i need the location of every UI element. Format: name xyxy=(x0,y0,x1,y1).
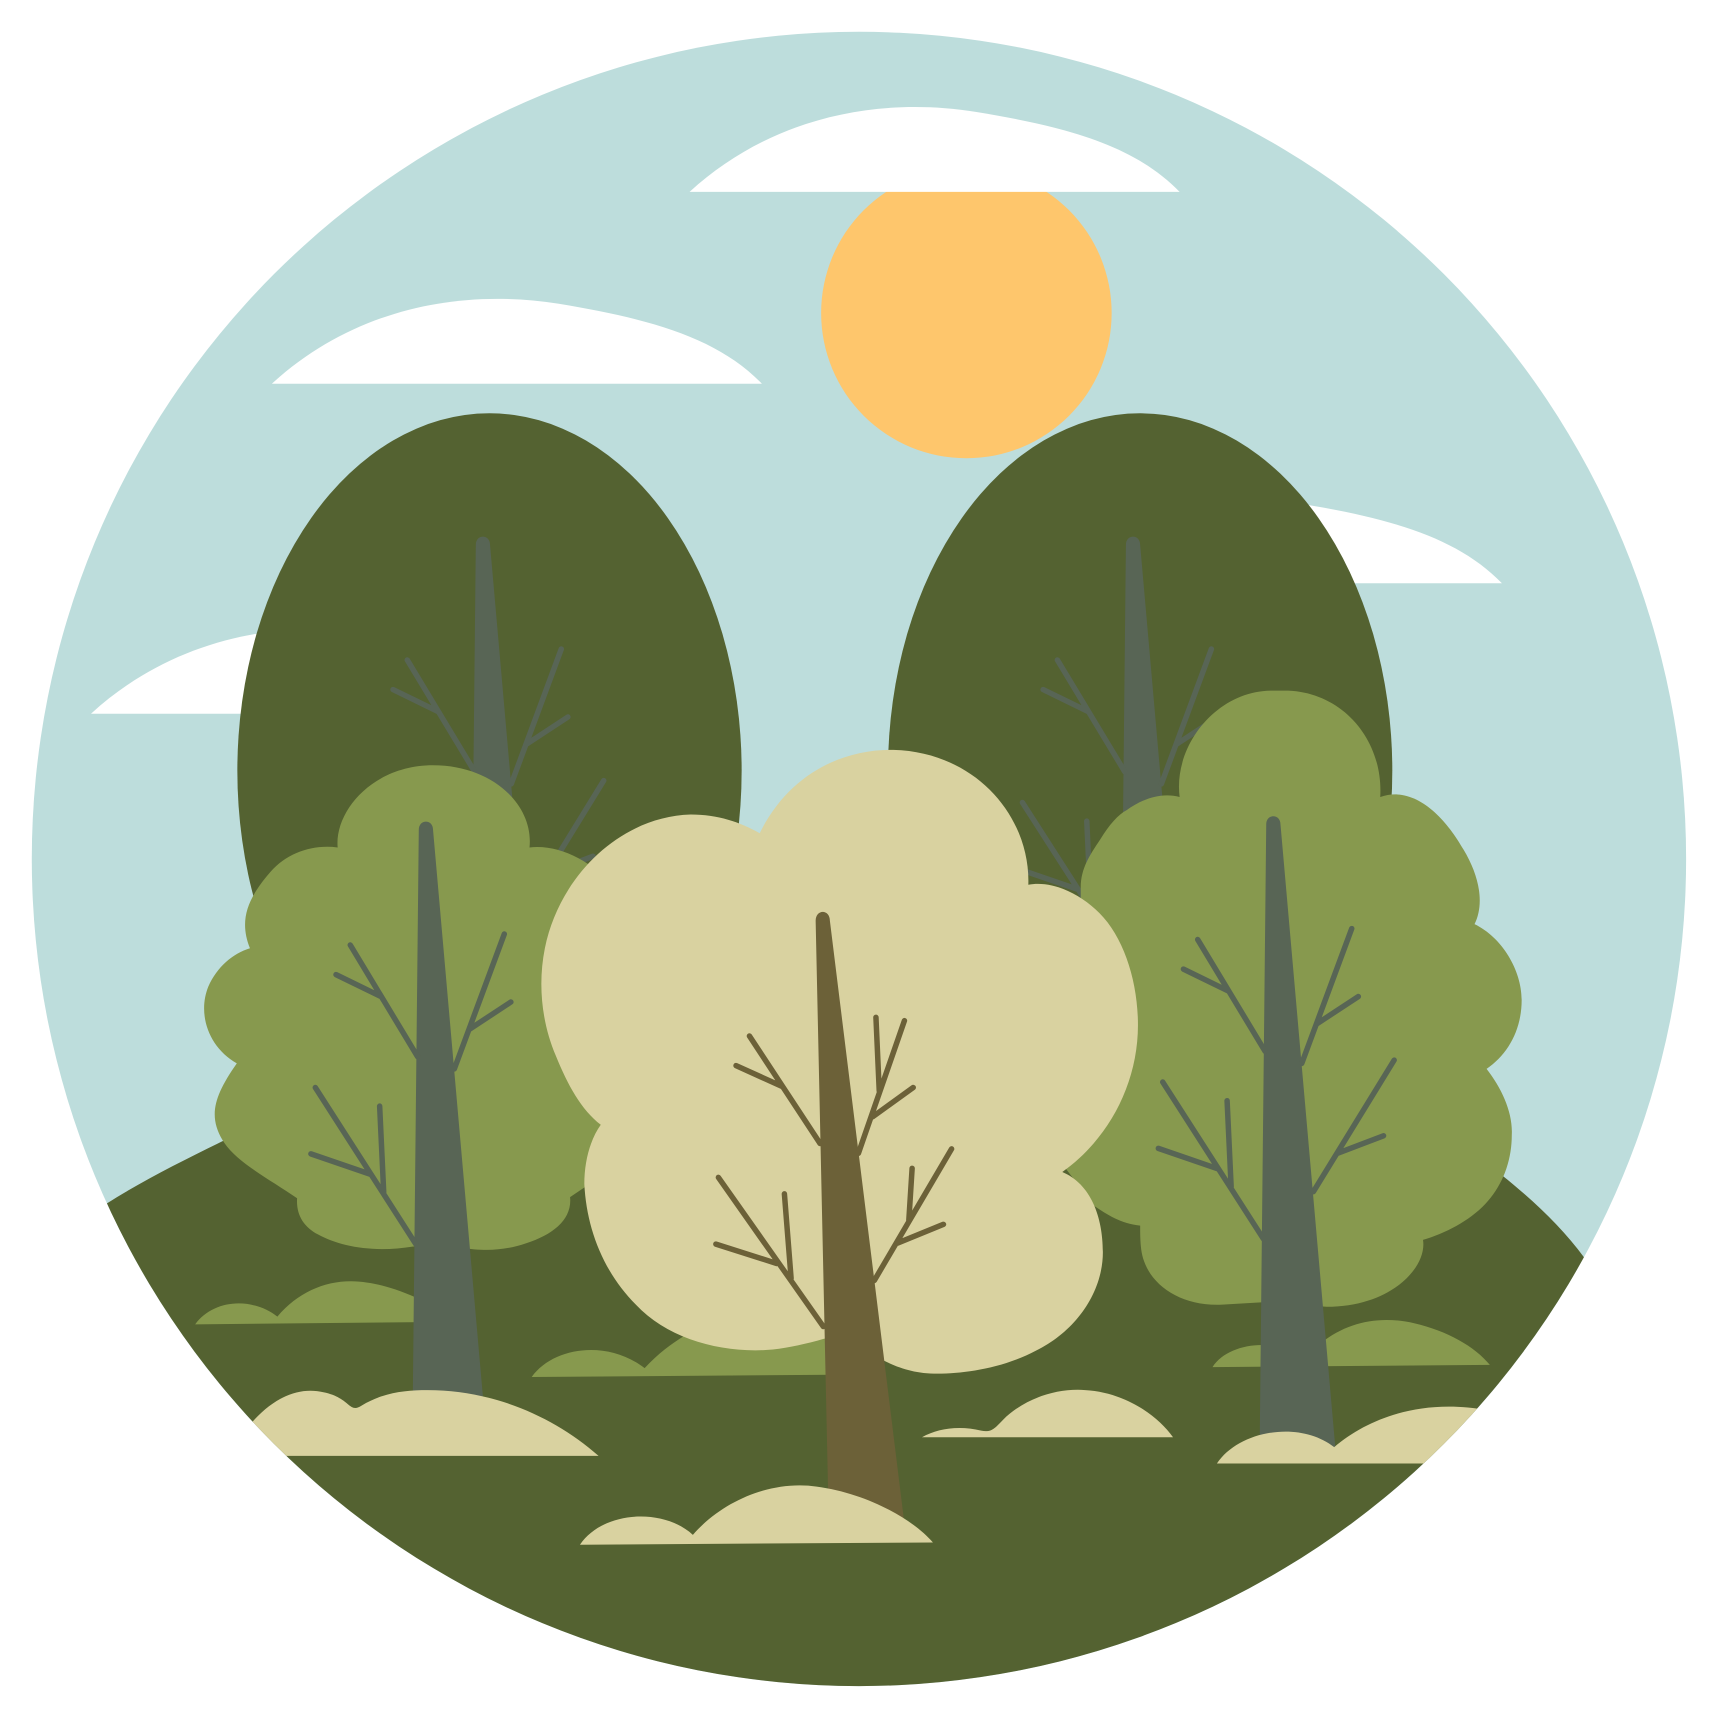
center branches xyxy=(716,1017,952,1327)
tree: left mid xyxy=(204,765,601,1396)
bush: cream bottom center xyxy=(580,1485,933,1545)
cloud: right xyxy=(1309,505,1502,584)
cloud: left upper xyxy=(272,299,762,384)
ground hill xyxy=(107,1141,1584,1686)
cloud: left lower xyxy=(91,634,256,714)
back tree right xyxy=(888,413,1392,898)
center trunk xyxy=(816,912,904,1524)
sun xyxy=(821,168,1112,458)
tree: center xyxy=(541,750,1138,1524)
bush: green left xyxy=(195,1281,422,1324)
back tree left xyxy=(237,413,742,896)
bush: green center xyxy=(532,1336,826,1377)
bush: cream right xyxy=(1217,1407,1491,1464)
bush: cream middle right xyxy=(922,1390,1173,1437)
cloud: top xyxy=(690,107,1180,192)
bush: cream left xyxy=(247,1390,599,1456)
tree: right mid xyxy=(1052,691,1522,1447)
bush: green right xyxy=(1213,1320,1490,1367)
